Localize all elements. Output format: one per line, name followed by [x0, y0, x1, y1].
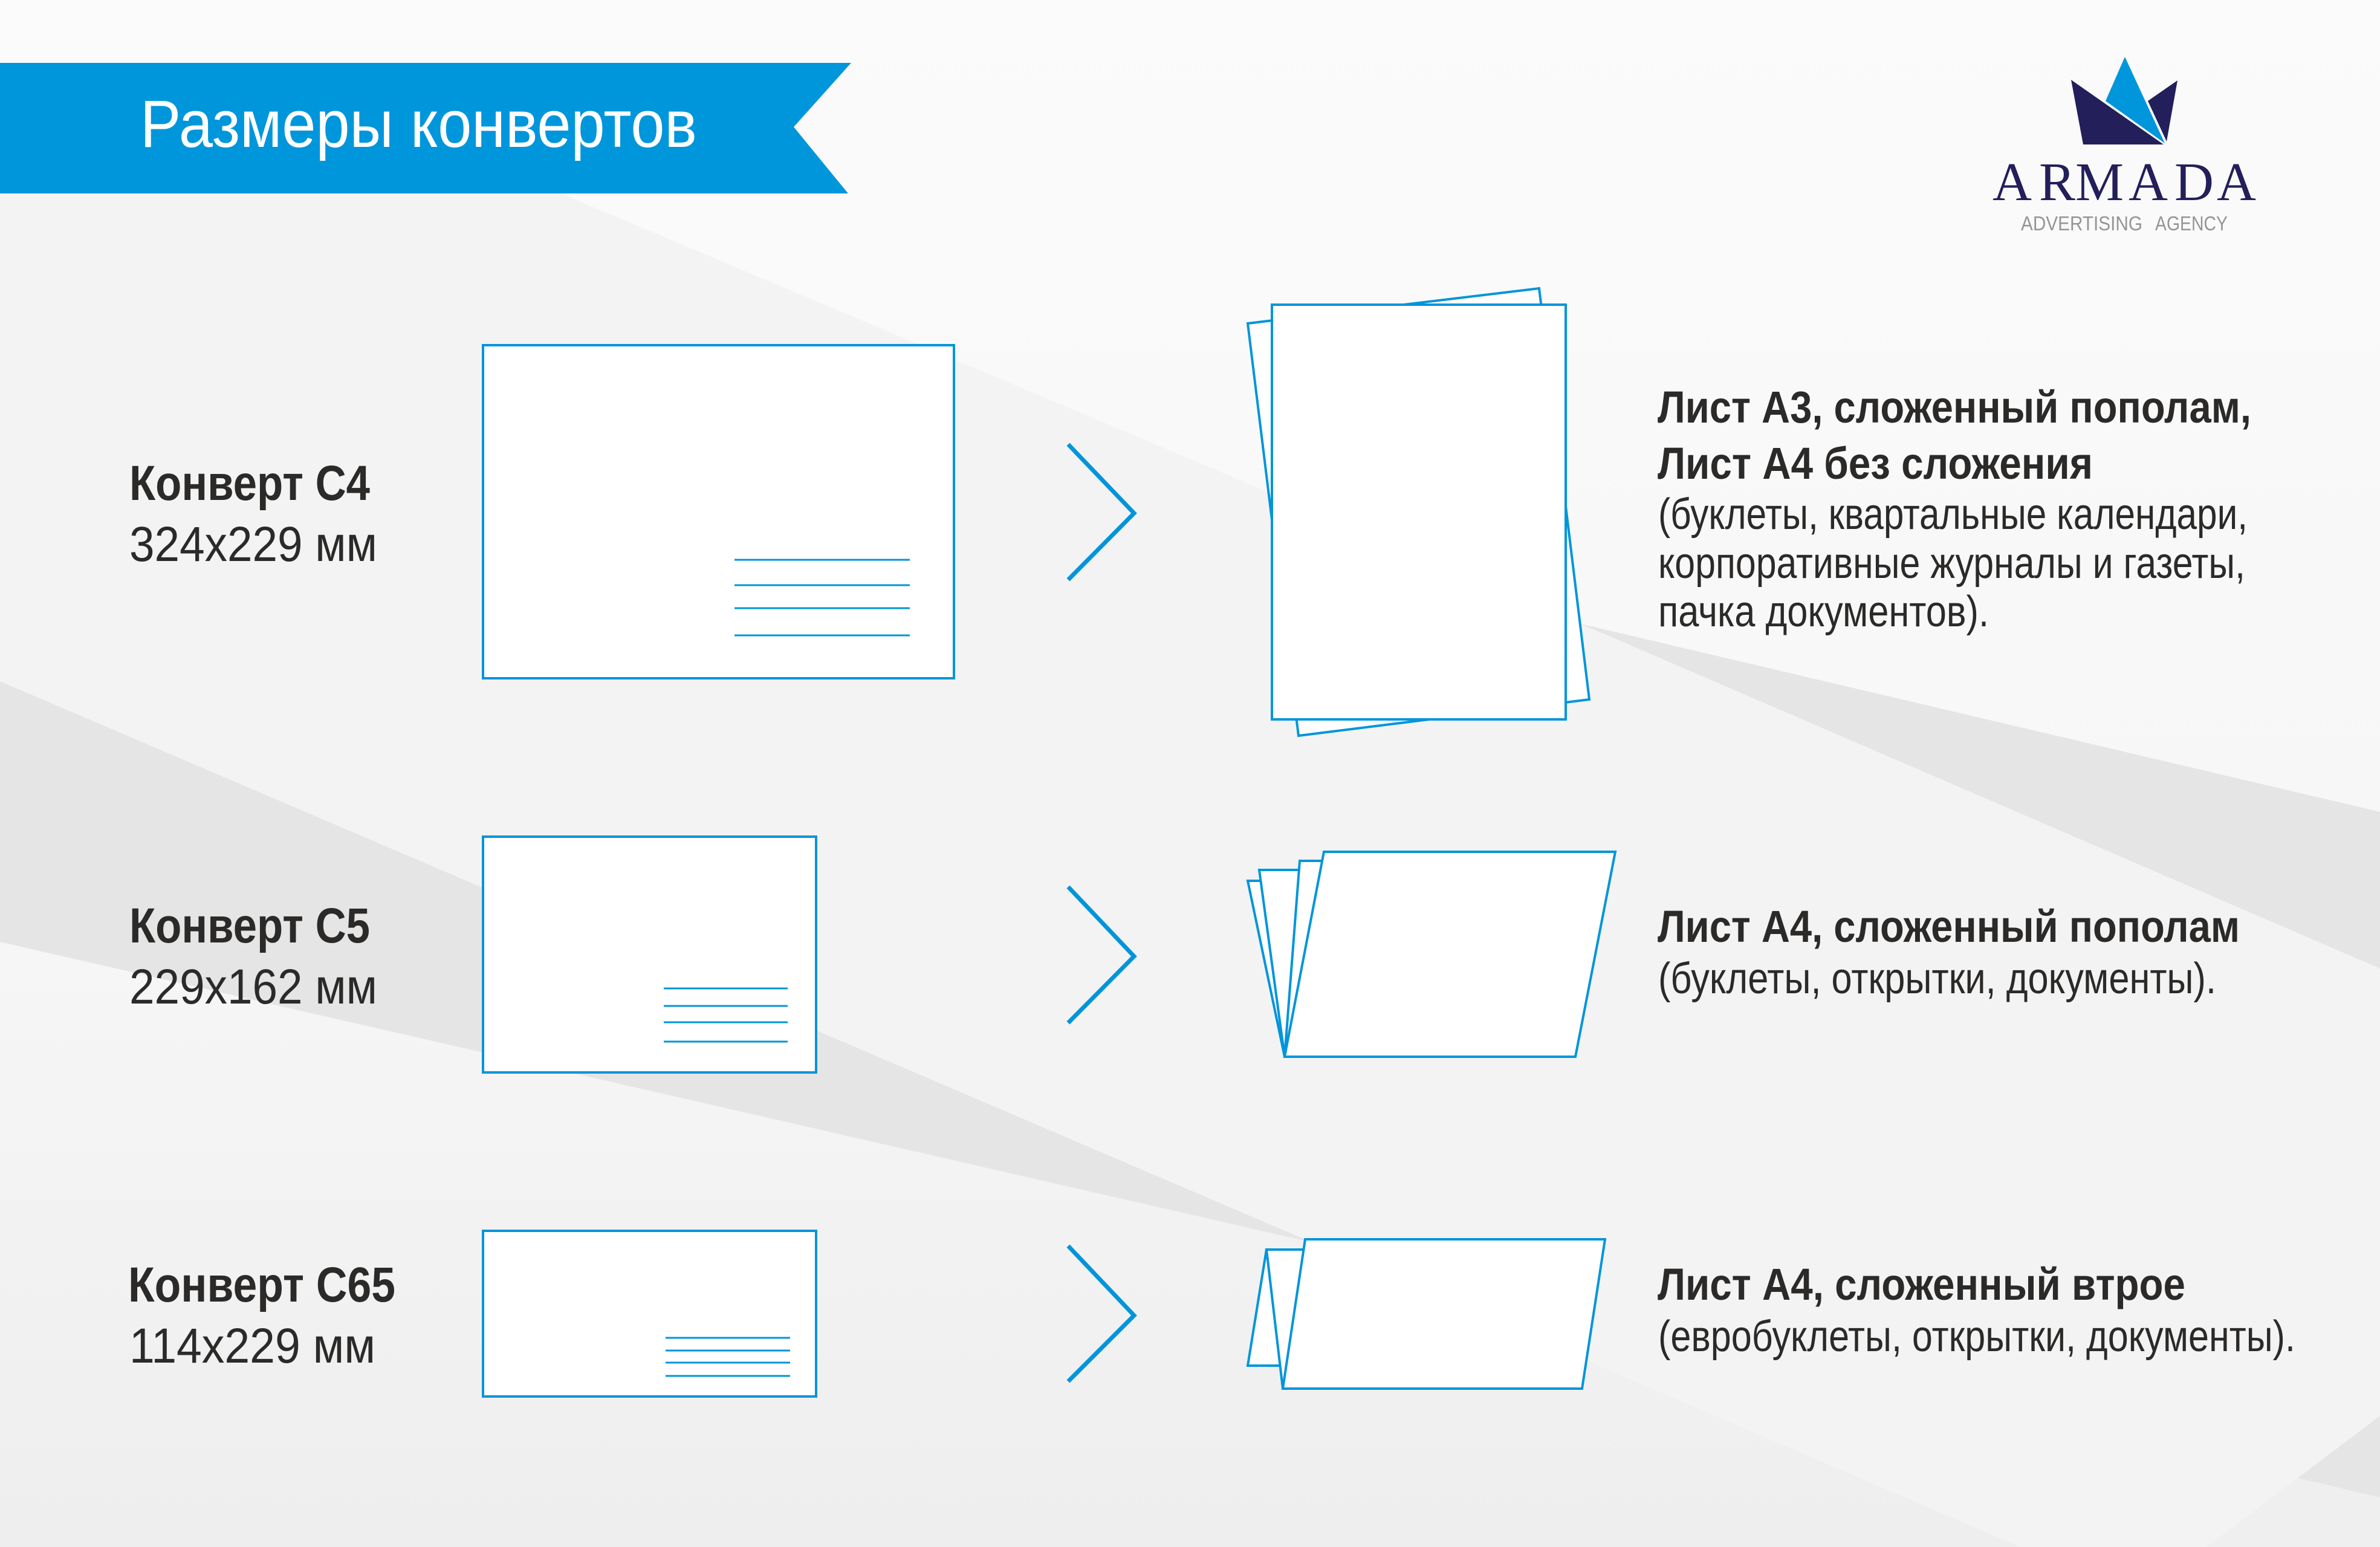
label: C5: 229x162 мм [129, 959, 377, 1014]
description: C65: Лист А4, сложенный втрое [1658, 1259, 2185, 1309]
label: C5 [129, 898, 377, 1014]
description: C5: Лист А4, сложенный пополам [1658, 901, 2240, 952]
label: C4 [129, 456, 377, 572]
logo tagline: ADVERTISING [2021, 212, 2142, 235]
label: C4: 324x229 мм [129, 517, 377, 572]
sheets: A4 folded in three [1248, 1239, 1605, 1389]
row: envelope C5 [129, 837, 2240, 1072]
description: C5 [1658, 901, 2240, 1003]
arrow [1068, 444, 1134, 580]
arrow [1068, 887, 1134, 1023]
label: C4: Конверт С4 [129, 456, 370, 511]
label: C65: 114x229 мм [129, 1318, 375, 1373]
icon: crown [2071, 57, 2177, 144]
label: C65 [128, 1257, 395, 1373]
label: C65: Конверт С65 [128, 1257, 395, 1312]
label: C5: Конверт С5 [129, 898, 370, 953]
logo wordmark: ARMADA [1993, 152, 2256, 212]
description: C65 [1658, 1259, 2295, 1361]
envelope C65 [483, 1231, 816, 1396]
logo tagline: AGENCY [2155, 212, 2228, 235]
logo: Armada [1993, 57, 2256, 235]
sheets: A3 folded, A4 [1248, 288, 1589, 736]
description: C4: Лист А3, сложенный пополам, [1658, 382, 2251, 432]
description: C4: Лист А4 без сложения [1658, 438, 2093, 488]
arrow [1068, 1246, 1134, 1381]
description: C5: (буклеты, открытки, документы). [1658, 955, 2216, 1003]
sheets: A4 folded in half [1248, 852, 1615, 1057]
description: C4 [1658, 382, 2251, 636]
description: C4: корпоративные журналы и газеты, [1658, 539, 2245, 588]
row: envelope C4 [129, 288, 2251, 736]
title: Размеры конвертов [140, 87, 697, 161]
logo tagline [2021, 212, 2228, 235]
description: C4: (буклеты, квартальные календари, [1658, 490, 2248, 539]
title banner [0, 63, 851, 193]
envelope C4 [483, 345, 954, 678]
row: envelope C65 [128, 1231, 2295, 1396]
envelope C5 [483, 837, 816, 1072]
description: C4: пачка документов). [1658, 588, 1989, 636]
